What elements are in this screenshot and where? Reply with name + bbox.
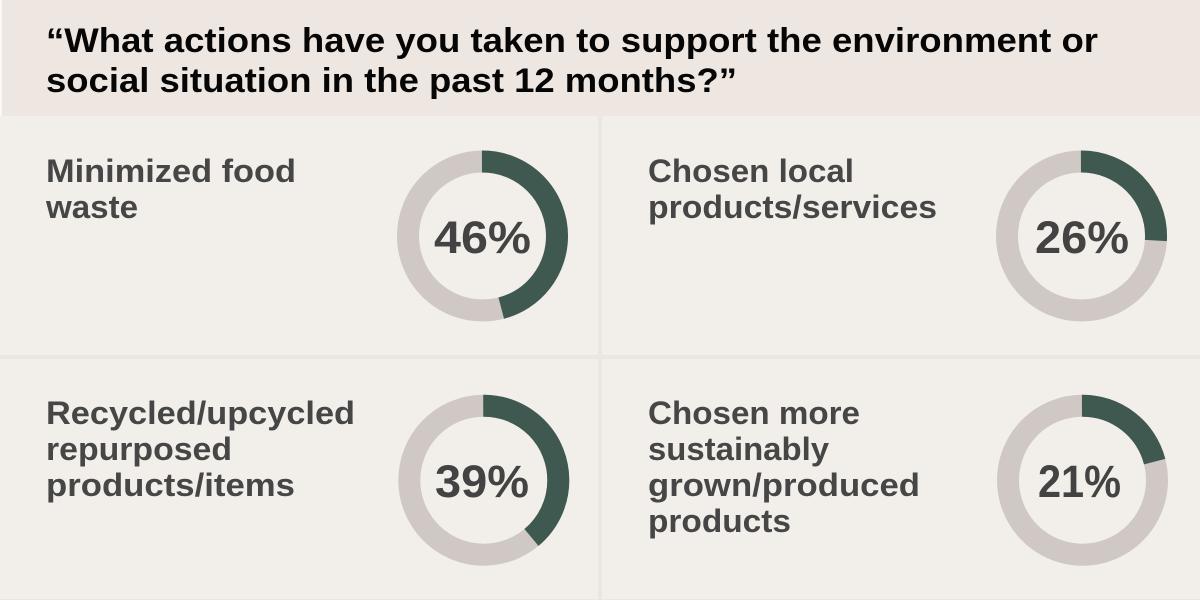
panel: chosen local products (602, 116, 1200, 355)
donut chart: 21% (1008, 406, 1157, 555)
panel: sustainably grown products: grown/produced (648, 467, 920, 503)
title banner: “What actions have you taken to support the environment or (46, 22, 1098, 60)
panel: sustainably grown products: Chosen more (648, 395, 860, 431)
donut chart: 21%: 21% (1038, 456, 1121, 507)
panel: recycled items: Recycled/upcycled (46, 395, 355, 431)
panel: minimized food waste: waste (45, 189, 138, 225)
donut chart: 46% (408, 162, 557, 310)
donut chart: 26%: 26% (1035, 212, 1129, 263)
panel: recycled items (0, 359, 598, 599)
donut chart: 39% (409, 406, 558, 555)
donut chart: 46%: 46% (434, 212, 531, 263)
panel: chosen local products: products/services (648, 189, 937, 225)
panel: sustainably grown products (602, 359, 1200, 599)
panel: chosen local products: Chosen local (648, 153, 854, 189)
donut chart: 26% (1007, 162, 1156, 310)
title banner (2, 0, 1200, 116)
panel: recycled items: products/items (46, 467, 295, 503)
panel: sustainably grown products: products (648, 503, 791, 539)
title banner: social situation in the past 12 months?” (46, 62, 737, 100)
panel: recycled items: repurposed (46, 431, 232, 467)
panel: minimized food waste (0, 116, 598, 355)
panel: minimized food waste: Minimized food (46, 153, 296, 189)
donut chart: 39%: 39% (435, 456, 529, 507)
panel: sustainably grown products: sustainably (648, 431, 829, 467)
